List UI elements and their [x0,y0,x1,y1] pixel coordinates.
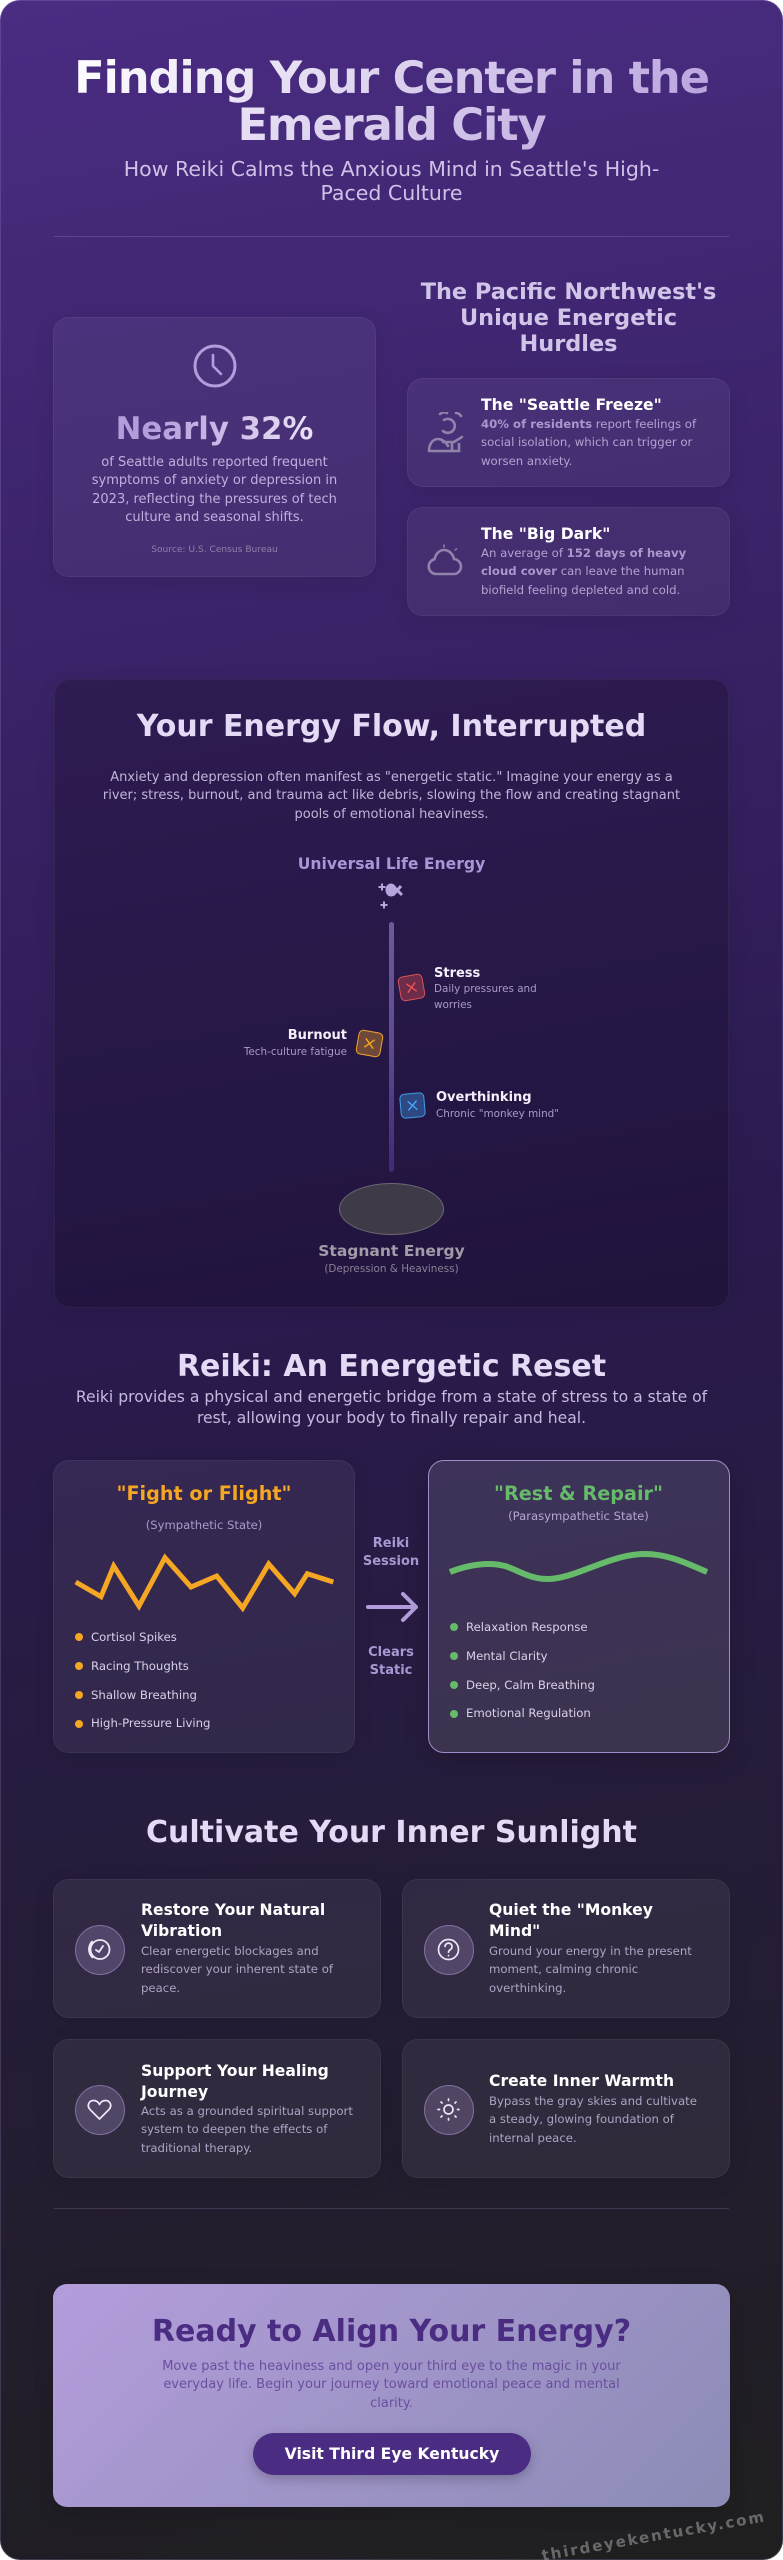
energy flow description [103,770,680,822]
arrow [366,1592,418,1622]
button: Visit Third Eye Kentucky [285,2445,499,2463]
text: Seattle Freeze: social isolation, which can trigger or [481,435,692,449]
subtitle: How Reiki Calms the Anxious Mind in Seattle's High- [124,157,659,181]
text: restore vibration: peace. [141,1981,180,1995]
sublabel: depression and heaviness: (Depression & Heaviness) [324,1263,459,1275]
text: inner warmth: Create Inner Warmth [489,2072,674,2090]
label: stagnant energy: Stagnant Energy [318,1242,465,1260]
icon: vibration [75,1925,125,1975]
blockage: stress [398,966,537,1011]
text: healing journey: system to deepen the effects of [141,2122,327,2136]
title [74,51,709,151]
icon: sun [424,2085,474,2135]
text: restore vibration: Restore Your Natural [141,1901,325,1919]
call to action text: everyday life. Begin your journey toward emotional peace and mental [163,2377,620,2392]
energy flow description: river; stress, burnout, and trauma act like debris, slowing the flow and creating stagnant [103,788,680,803]
list: calm outcomes: Mental Clarity [466,1649,548,1663]
text: Big Dark: cloud cover can leave the human [481,564,685,578]
sublabel: parasympathetic: (Parasympathetic State) [508,1509,649,1523]
label: clears static: Clears [368,1645,414,1660]
stress description: worries [434,999,472,1011]
panel: quiet monkey mind [402,1879,730,2018]
stress label: Stress [434,966,480,981]
title: Finding Your Center in the [74,51,709,104]
stress description [434,983,537,1011]
icon: clock [194,344,236,388]
list: stress symptoms: Cortisol Spikes [91,1630,177,1644]
text: inner warmth: internal peace. [489,2131,577,2145]
heading: inner sunlight: Cultivate Your Inner Sunlight [146,1815,637,1850]
text: Seattle Freeze: worsen anxiety. [481,454,572,468]
button [253,2433,531,2475]
call to action text: clarity. [370,2396,413,2411]
text: Big Dark: biofield feeling depleted and cold. [481,583,680,597]
reiki description: Reiki provides a physical and energetic bridge from a state of stress to a state of [76,1388,707,1406]
label: reiki session: Session [363,1554,419,1569]
panel: statistic [53,317,376,577]
icon: stress block [397,973,426,1002]
panel: rest and repair [428,1460,730,1753]
heading: reiki reset: Reiki: An Energetic Reset [177,1349,606,1384]
panel: healing journey [53,2039,381,2178]
text: quiet mind: Quiet the "Monkey [489,1901,653,1919]
stat description: of Seattle adults reported frequent [101,455,328,470]
stat description [92,455,337,525]
panel: call to action [53,2284,730,2507]
panel: fight or flight [53,1460,355,1753]
list: calm outcomes: Deep, Calm Breathing [466,1678,595,1692]
heading: hurdles: The Pacific Northwest's [421,279,716,305]
icon: overthinking block [399,1092,426,1119]
text: healing journey: traditional therapy. [141,2141,252,2155]
icon: heart [75,2085,125,2135]
heading: rest and repair: "Rest & Repair" [494,1482,663,1505]
text: healing journey: Support Your Healing [141,2062,329,2080]
heading: energy flow: Your Energy Flow, Interrupted [137,709,646,744]
text: Seattle Freeze: 40% of residents report feelings of [481,417,696,431]
list: stress symptoms: High-Pressure Living [91,1716,210,1730]
list: calm outcomes: Relaxation Response [466,1620,588,1634]
heading: call to action: Ready to Align Your Energy? [152,2314,631,2349]
panel: Seattle Freeze [407,378,730,487]
sublabel: sympathetic: (Sympathetic State) [146,1518,262,1532]
text: healing journey [140,2062,353,2155]
heading: hurdles: Unique Energetic [460,305,677,331]
stat description: 2023, reflecting the pressures of tech [92,492,337,507]
text: restore vibration: Vibration [141,1922,222,1940]
stat number [54,410,375,448]
text: quiet mind [489,1901,692,1995]
burnout description: Tech-culture fatigue [244,1046,347,1058]
text: healing journey: Journey [141,2083,208,2101]
text: quiet mind: Mind" [489,1922,540,1940]
heading: fight or flight: "Fight or Flight" [116,1482,292,1505]
text: Big Dark: An average of 152 days of heavy [481,546,686,560]
list: stress symptoms [75,1630,210,1730]
text: quiet mind: Ground your energy in the present [489,1944,692,1958]
heading: hurdles: Hurdles [520,331,617,357]
heading: hurdles [420,279,716,357]
text: Seattle Freeze [481,396,696,468]
icon: sparkles [378,884,403,908]
icon: sun and cloud [428,412,464,452]
text: restore vibration: rediscover your inherent state of [141,1962,333,1976]
list: stress symptoms: Racing Thoughts [91,1659,189,1673]
list: calm outcomes: Emotional Regulation [466,1706,591,1720]
label: clears static [368,1645,414,1678]
icon: burnout block [355,1029,384,1058]
label: clears static: Static [370,1663,412,1678]
text: inner warmth: a steady, glowing foundation of [489,2112,674,2126]
subtitle: Paced Culture [320,181,463,205]
stat description: culture and seasonal shifts. [125,510,304,525]
text: restore vibration: Clear energetic blockages and [141,1944,319,1958]
call to action text [162,2359,621,2411]
blockage: burnout [244,1028,384,1058]
text: quiet mind: moment, calming chronic [489,1962,638,1976]
energy stream [389,922,394,1172]
label: reiki session: Reiki [373,1536,409,1551]
text: Seattle Freeze: The "Seattle Freeze" [481,396,662,414]
title: Emerald City [237,98,546,151]
icon: cloud [427,544,462,576]
text: quiet mind: overthinking. [489,1981,566,1995]
reiki description [76,1388,708,1427]
overthinking label: Overthinking [436,1090,532,1105]
energy flow description: Anxiety and depression often manifest as "energetic static." Imagine your energy as a [110,770,673,785]
panel: restore vibration [53,1879,381,2018]
text: inner warmth [489,2072,697,2145]
panel: Big Dark [407,507,730,616]
burnout label: Burnout [288,1028,347,1043]
energy flow description: pools of emotional heaviness. [294,807,488,822]
call to action text: Move past the heaviness and open your third eye to the magic in your [162,2359,621,2374]
list: calm outcomes [450,1620,595,1720]
text: Big Dark [481,525,686,597]
subtitle [124,157,659,205]
list: stress symptoms: Shallow Breathing [91,1688,197,1702]
label: universal life energy: Universal Life Energy [298,855,485,873]
reiki description: rest, allowing your body to finally repair and heal. [197,1409,586,1427]
blockage: overthinking [399,1090,559,1120]
text: inner warmth: Bypass the gray skies and cultivate [489,2094,697,2108]
stat number: Nearly 32% [116,411,313,447]
stat description: symptoms of anxiety or depression in [92,473,337,488]
label: reiki session [363,1536,419,1569]
chart: calm wave [449,1551,708,1582]
chart: jagged line [74,1554,334,1612]
overthinking description: Chronic "monkey mind" [436,1108,559,1120]
stress description: Daily pressures and [434,983,537,995]
panel: inner warmth [402,2039,730,2178]
icon: question [424,1925,474,1975]
panel: energy flow [54,679,729,1308]
text: Big Dark: The "Big Dark" [481,525,610,543]
source: Source: U.S. Census Bureau [151,545,278,555]
stagnant pool [339,1183,444,1234]
text: restore vibration [141,1901,334,1995]
text: healing journey: Acts as a grounded spiritual support [141,2104,353,2118]
